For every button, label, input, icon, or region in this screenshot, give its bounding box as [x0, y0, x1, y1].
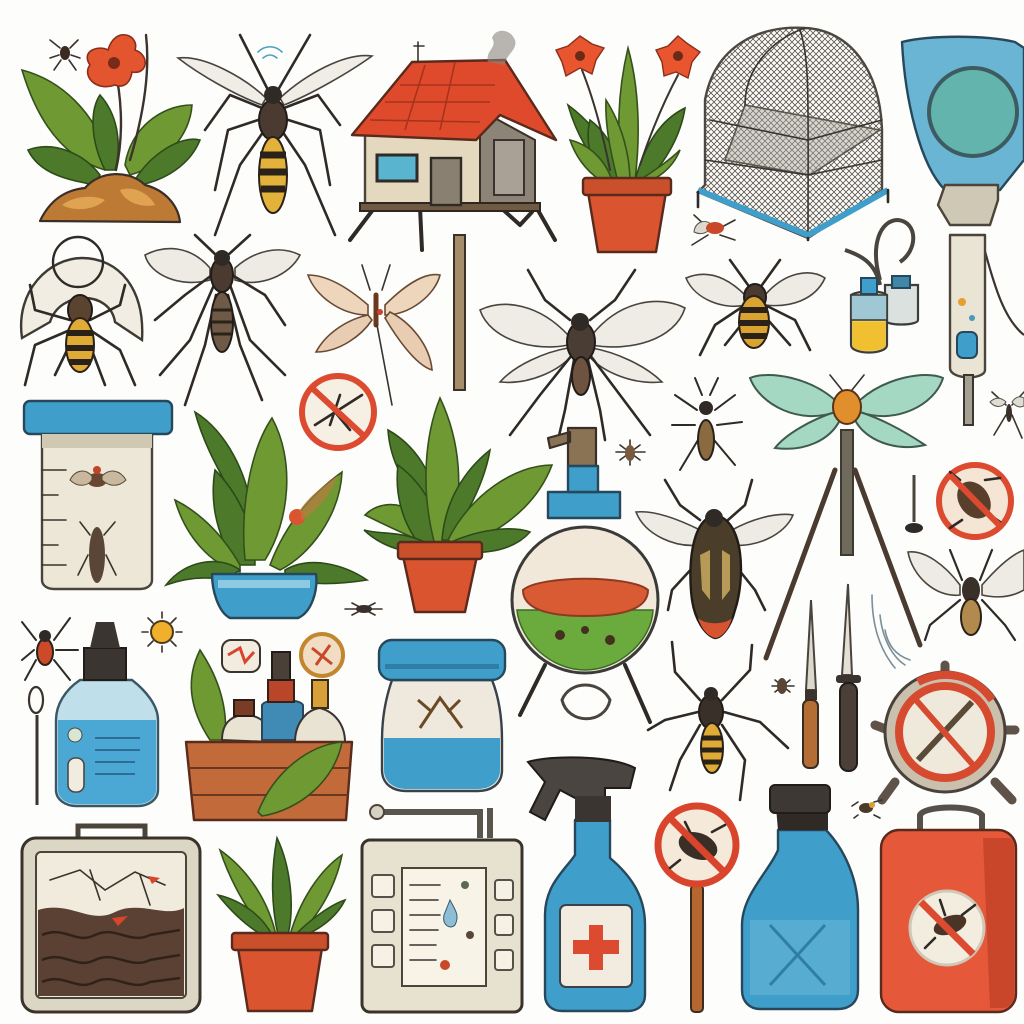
- icon: mesh net cage: [698, 28, 888, 240]
- icon: potted plant with orange flowers: [556, 36, 700, 252]
- icon: control panel device: [362, 805, 522, 1012]
- icon: blue spray bottle with dark cap: [56, 622, 158, 806]
- icon: pale moth: [308, 265, 440, 405]
- icon: large gray mosquito: [480, 270, 685, 440]
- icon: blue jug: [742, 785, 858, 1009]
- icon: measuring jar with insects: [24, 401, 172, 589]
- icon: small bug and blades: [772, 584, 910, 771]
- icon: top mosquito with striped abdomen: [178, 35, 372, 235]
- icon: wasp in dome helmet: [21, 237, 142, 385]
- icon: house on stilts: [350, 31, 556, 390]
- icon: leafy potted plant: [364, 398, 552, 612]
- icon: blue trigger spray bottle with cross: [528, 757, 645, 1011]
- icon: round gauge with prohibition: [875, 665, 1015, 800]
- icon: brown mosquito left: [145, 235, 300, 405]
- icon: grass plant in terracotta pot: [218, 838, 345, 1011]
- icon: prohibition sign with bug right: [939, 465, 1011, 537]
- icon: striped bee fly: [686, 260, 825, 355]
- icon: blue handheld device: [902, 37, 1024, 425]
- icon: crate of bottles with leaves: [186, 634, 352, 820]
- icon: wasp spider lower: [648, 642, 788, 800]
- icon: dark beetle with wings: [636, 480, 793, 638]
- icon: blue lidded jar with insect: [379, 640, 505, 791]
- icon: tiny mosquito far right and dart: [905, 392, 1024, 533]
- icon: small sun: [142, 612, 182, 652]
- icon: red canister with prohibition: [881, 808, 1016, 1012]
- icon: soil cross-section case: [22, 826, 200, 1012]
- icon: whisk tool: [29, 687, 43, 805]
- icon: sphere pressure sprayer on stand: [512, 428, 658, 722]
- icon: prohibition sign with mosquito: [302, 376, 374, 448]
- icon: mosquito right edge: [908, 550, 1024, 640]
- icon: small red bug: [22, 618, 78, 680]
- icon: prohibition sign on stick: [658, 806, 736, 1012]
- icon: small vials with hook: [845, 220, 918, 352]
- icon: small insect low right: [852, 800, 882, 818]
- icon: plant in blue bowl: [166, 412, 367, 618]
- icon: tiny bugs mid: [345, 440, 645, 615]
- icon: winged bug on tripod: [750, 375, 943, 658]
- icon: small red fly: [692, 215, 735, 245]
- icon: small spider-like fly: [672, 378, 742, 470]
- icon: flowering plant on soil mound: [22, 35, 200, 222]
